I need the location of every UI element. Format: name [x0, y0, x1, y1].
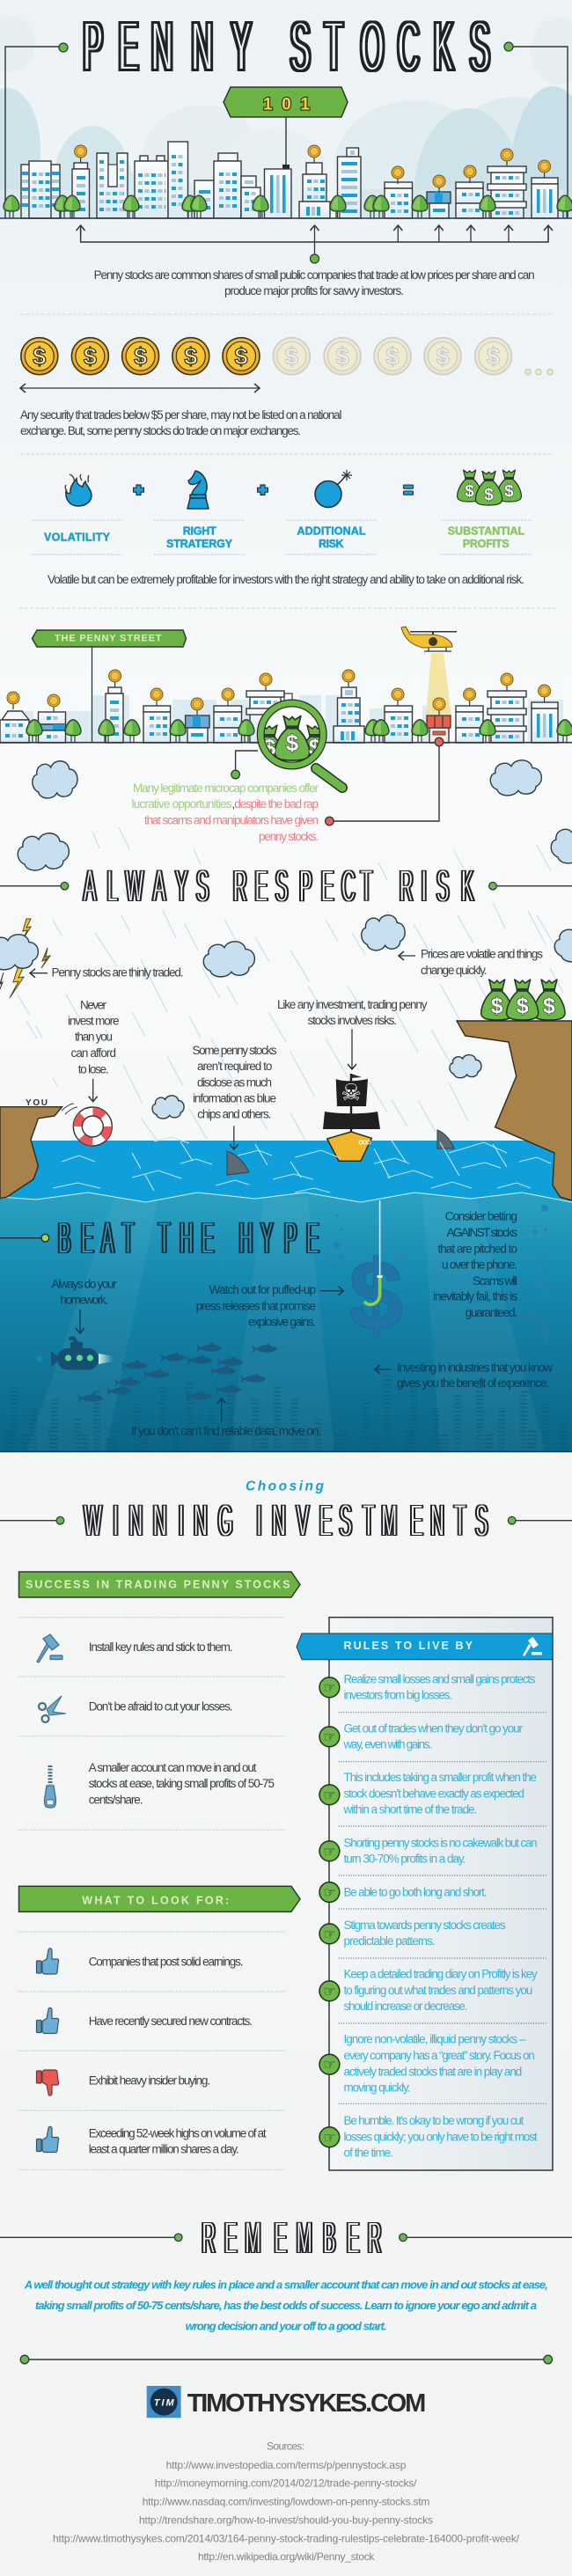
equation labels: RISK — [319, 538, 343, 550]
closing statement — [24, 2279, 548, 2332]
money bags on right cliff: $ — [491, 994, 503, 1018]
callout: industries you know: gives you the benefit of experience. — [397, 1376, 549, 1390]
what to look for list — [18, 1932, 284, 2169]
icon: dollar sign on hook: $ — [348, 1240, 403, 1350]
light rays — [26, 1197, 546, 1451]
callout: trading involves risks — [277, 998, 428, 1069]
callout: prices volatile: Prices are volatile and things — [421, 948, 543, 961]
rule 8: Ignore non-volatile, illiquid penny stocks – — [343, 2033, 526, 2046]
rule 8: moving quickly. — [343, 2081, 410, 2094]
rule 4: Shorting penny stocks is no cakewalk but can — [343, 1836, 538, 1849]
coins row: five dollar price scale: $ — [184, 343, 197, 370]
equation labels — [32, 520, 532, 554]
callout: press releases: press releases that promise — [196, 1299, 316, 1312]
section: the penny street — [0, 627, 572, 843]
rule 3: stock doesn’t behave exactly as expected — [343, 1787, 524, 1800]
logo: timothysykes.com: TIM — [154, 2397, 175, 2408]
callout: never invest more: can afford — [70, 1046, 116, 1060]
rule 8: actively traded stocks that are in play and — [343, 2065, 522, 2078]
item: solid earnings — [37, 1949, 243, 1974]
intro text: Penny stocks are common shares of small public companies that trade at low prices per share and can — [94, 268, 535, 282]
sources: http://www.nasdaq.com/investing/lowdown-on-penny-stocks.stm — [143, 2496, 429, 2508]
equation: volatility + strategy + risk = profits — [32, 470, 532, 554]
wave surface line — [0, 1193, 572, 1202]
water surface — [0, 1141, 572, 1207]
item: 52-week highs: least a quarter million shares a day. — [89, 2143, 239, 2156]
sources: http://trendshare.org/how-to-invest/should-you-buy-penny-stocks — [139, 2514, 433, 2526]
logo: timothysykes.com: TIMOTHYSYKES.COM — [187, 2389, 426, 2418]
callout: bet against stocks: that are pitched to — [438, 1242, 517, 1255]
callout: bet against stocks: inevitably fail, this is — [433, 1290, 517, 1303]
hype text blocks — [51, 1210, 553, 1438]
waves and rain on water — [53, 1137, 551, 1193]
callout: press releases — [196, 1283, 343, 1329]
storm cloud with lightning — [0, 919, 50, 998]
connectors — [231, 738, 444, 826]
magnifying glass over money bags: $ — [286, 730, 299, 756]
text: legitimate microcap companies: Many legitimate microcap companies offer — [133, 782, 319, 795]
sources: http://www.timothysykes.com/2014/03/164-penny-stock-trading-rulestips-celebrate-164000-profit-week/ — [53, 2532, 520, 2544]
callout: do your homework: Always do your — [51, 1277, 117, 1290]
text: below five dollars: Any security that trades below $5 per share, may not be listed on a national — [20, 408, 341, 422]
heading: Choosing: Choosing — [246, 1479, 325, 1493]
coins row: five dollar price scale: $ — [487, 343, 500, 370]
text: legitimate microcap companies: that scams and manipulators have given — [144, 814, 319, 827]
callout: prices volatile — [399, 948, 543, 977]
banner: success in trading penny stocks — [19, 1572, 300, 1597]
bubbles — [37, 1205, 549, 1361]
coins row: five dollar price scale — [21, 338, 553, 375]
money bags on right cliff — [481, 980, 565, 1020]
item: smaller account: cents/share. — [89, 1793, 143, 1806]
icon: blue flame — [65, 474, 92, 506]
text: legitimate microcap companies — [132, 782, 319, 843]
text: legitimate microcap companies: , — [232, 797, 235, 811]
callout: industries you know — [375, 1361, 553, 1390]
sources: Sources: — [267, 2440, 304, 2453]
callout: some penny stocks: disclose as much — [197, 1075, 272, 1089]
callout: bet against stocks: Consider betting — [445, 1210, 517, 1223]
banner: success in trading penny stocks: SUCCESS IN TRADING PENNY STOCKS — [26, 1579, 290, 1591]
money bags on right cliff: $ — [517, 994, 529, 1018]
rule 1: investors from big losses. — [343, 1688, 452, 1701]
text: legitimate microcap companies: despite the bad rap — [234, 797, 319, 811]
success list — [18, 1618, 284, 1830]
sources: http://www.investopedia.com/terms/p/pennystock.asp — [166, 2459, 407, 2471]
street buildings — [0, 670, 572, 743]
callout: press releases: Watch out for puffed-up — [209, 1283, 316, 1296]
icon: bomb — [315, 470, 352, 507]
street sign: THE PENNY STREET — [55, 634, 165, 644]
magnifying glass over money bags: $ — [263, 734, 276, 760]
badge: 101: 101 — [263, 95, 310, 114]
rule 5 — [319, 1882, 488, 1902]
coins row: five dollar price scale: $ — [436, 343, 450, 370]
title: Remember: REMEMBER — [202, 2214, 381, 2264]
rule 9 — [319, 2114, 538, 2159]
rule 6 — [319, 1919, 506, 1948]
coins row: five dollar price scale: $ — [335, 343, 349, 370]
underwater scene — [0, 1193, 572, 1452]
equation labels: PROFITS — [463, 538, 510, 550]
title: Always Respect Risk — [0, 862, 572, 912]
panel: rules to live by — [297, 1618, 553, 2170]
title connector lines — [5, 42, 568, 218]
rule 7: should increase or decrease. — [343, 2000, 468, 2013]
sources — [53, 2440, 520, 2563]
icon: three money bags: $ — [465, 482, 474, 501]
coins row: five dollar price scale: $ — [33, 343, 46, 370]
life ring and you label: YOU — [26, 1098, 48, 1108]
callout: do your homework — [51, 1277, 117, 1333]
callout: some penny stocks — [192, 1044, 277, 1149]
coins row: five dollar price scale: $ — [84, 343, 97, 370]
magnifying glass over money bags — [253, 703, 342, 788]
sources: http://moneymorning.com/2014/02/12/trade-penny-stocks/ — [155, 2477, 417, 2490]
icon: telephone handset — [526, 1317, 546, 1341]
text: volatile but profitable: Volatile but can be extremely profitable for investors with the right strategy and ability to take on additional risk. — [48, 573, 524, 586]
text: legitimate microcap companies: lucrative opportunities — [132, 797, 232, 811]
intro text — [94, 268, 535, 297]
pirate ship: ☠ — [341, 1080, 362, 1106]
rule 3: within a short time of the trade. — [343, 1803, 477, 1816]
rule 5: Be able to go both long and short. — [343, 1885, 488, 1898]
callout: some penny stocks: information as blue — [193, 1091, 276, 1105]
callout: some penny stocks: Some penny stocks — [192, 1044, 277, 1057]
callout: thinly traded: Penny stocks are thinly traded. — [51, 965, 183, 979]
rule 4: turn 30-70% profits in a day. — [343, 1853, 466, 1866]
callout: trading involves risks: stocks involves risks. — [308, 1014, 397, 1027]
banner: rules to live by — [297, 1633, 553, 1660]
skyline background clouds — [0, 86, 572, 218]
money bags on right cliff: $ — [543, 994, 555, 1018]
item: cut losses — [39, 1696, 232, 1722]
callout: never invest more: Never — [80, 998, 107, 1011]
rule 9: losses quickly; you only have to be right most — [343, 2130, 538, 2143]
rule 6: predictable patterns. — [343, 1934, 436, 1948]
icon: chess knight — [187, 471, 209, 509]
callout: bet against stocks: AGAINST stocks — [447, 1226, 517, 1239]
callout: some penny stocks: chips and others. — [197, 1108, 271, 1121]
item: smaller account — [44, 1761, 275, 1808]
rule 7 — [319, 1968, 538, 2013]
callout: bet against stocks — [433, 1210, 517, 1319]
city skyline with coins — [0, 142, 572, 218]
callout: some penny stocks: aren’t required to — [197, 1060, 272, 1073]
equation labels: ADDITIONAL — [297, 525, 366, 538]
rain — [9, 827, 563, 1142]
banner: rules to live by: RULES TO LIVE BY — [343, 1640, 473, 1652]
equation labels: RIGHT — [183, 525, 216, 538]
sharks — [227, 1130, 454, 1175]
street sign — [32, 630, 187, 743]
item: insider buying — [37, 2070, 210, 2095]
callout: never invest more: than you — [75, 1031, 113, 1044]
equation labels: STRATERGY — [166, 538, 233, 550]
coins row: five dollar price scale: $ — [385, 343, 400, 370]
item: 52-week highs: Exceeding 52-week highs on volume of at — [89, 2127, 267, 2140]
callout: reliable data: If you don’t can’t find reliable data, move on. — [131, 1425, 321, 1438]
rule 9: of the time. — [343, 2146, 393, 2159]
callout: press releases: explosive gains. — [248, 1316, 316, 1329]
callout: bet against stocks: u over the phone. — [442, 1259, 517, 1272]
item: install key rules: Install key rules and stick to them. — [89, 1640, 232, 1654]
title: Winning Investments: WINNING INVESTMENTS — [84, 1497, 488, 1546]
callout: do your homework: homework. — [60, 1294, 108, 1307]
magnifying glass over money bags: $ — [309, 734, 322, 760]
rule 2: way, even with gains. — [343, 1738, 432, 1751]
title: Remember — [0, 2214, 572, 2264]
cliffs — [0, 1021, 572, 1200]
item: solid earnings: Companies that post solid earnings. — [89, 1955, 243, 1968]
callout: bet against stocks: Scams will — [473, 1274, 517, 1288]
school of fish — [77, 1342, 278, 1403]
rule 1 — [319, 1672, 536, 1701]
item: new contracts: Have recently secured new contracts. — [89, 2015, 253, 2028]
title: Penny Stocks: PENNY STOCKS — [83, 7, 489, 86]
icon: three money bags — [458, 470, 521, 505]
risk text blocks — [30, 948, 543, 1149]
intro text: produce major profits for savvy investors. — [224, 284, 404, 297]
rule 7: to figuring out what trades and patterns you — [343, 1984, 532, 1997]
rule 3: This includes taking a smaller profit when the — [343, 1771, 537, 1784]
closing statement: taking small profits of 50-75 cents/share, has the best odds of success. Learn to ignore your ego and admit a — [35, 2299, 537, 2312]
clouds — [18, 760, 572, 1119]
coins row: five dollar price scale: $ — [134, 343, 147, 370]
item: cut losses: Don’t be afraid to cut your losses. — [89, 1700, 232, 1714]
closing statement: wrong decision and your off to a good start. — [186, 2319, 387, 2332]
item: install key rules — [37, 1634, 232, 1662]
item: smaller account: A smaller account can move in and out — [89, 1761, 257, 1774]
icon: three money bags: $ — [504, 482, 514, 501]
seaweed — [14, 1373, 563, 1452]
callout: bet against stocks: guaranteed. — [466, 1306, 517, 1319]
text: below five dollars — [20, 408, 341, 437]
icon: dollar sign on hook — [348, 1200, 408, 1350]
equation labels: VOLATILITY — [44, 532, 111, 544]
right cliff — [457, 1021, 572, 1200]
pirate ship — [323, 1074, 380, 1161]
callout: never invest more: invest more — [68, 1015, 120, 1028]
icon: plus — [258, 485, 268, 495]
item: 52-week highs — [37, 2126, 267, 2156]
rule 4 — [319, 1836, 538, 1866]
life ring and you label — [26, 1098, 112, 1146]
text: legitimate microcap companies: penny stocks. — [259, 830, 319, 843]
title: Beat the Hype: BEAT THE HYPE — [58, 1215, 319, 1264]
equation labels: SUBSTANTIAL — [448, 525, 525, 538]
rule 7: Keep a detailed trading diary on Profitly is key — [343, 1968, 538, 1981]
coins row: five dollar price scale: $ — [285, 343, 298, 370]
icon: plus — [134, 485, 143, 495]
sources: http://en.wikipedia.org/wiki/Penny_stock — [198, 2550, 375, 2563]
callout: never invest more — [68, 998, 120, 1102]
rule 8: every company has a “great” story. Focus on — [343, 2049, 535, 2062]
helicopter spotlight — [426, 653, 451, 716]
callout: trading involves risks: Like any investment, trading penny — [277, 998, 428, 1011]
title: Always Respect Risk: ALWAYS RESPECT RISK — [84, 862, 473, 912]
item: smaller account: stocks at ease, taking small profits of 50-75 — [89, 1777, 275, 1790]
closing statement: A well thought out strategy with key rules in place and a smaller account that can move in and out stocks at ease, — [24, 2279, 548, 2292]
arrow: price range — [20, 387, 260, 389]
icon: submarine — [51, 1336, 113, 1369]
icon: equals — [403, 485, 414, 495]
banner: what to look for: WHAT TO LOOK FOR: — [82, 1894, 229, 1906]
rule 6: Stigma towards penny stocks creates — [343, 1919, 506, 1932]
rule 3 — [319, 1771, 537, 1816]
rule 8 — [319, 2033, 535, 2094]
divider with dots — [20, 2355, 552, 2364]
pale background buildings — [5, 695, 563, 743]
helicopter — [401, 627, 457, 651]
arrows to penny stock buildings — [81, 225, 548, 263]
text: below five dollars: exchange. But, some penny stocks do trade on major exchanges. — [20, 424, 301, 437]
callout: never invest more: to lose. — [78, 1062, 109, 1075]
item: new contracts — [37, 2007, 253, 2033]
badge: 101 — [224, 87, 348, 169]
banner: what to look for — [19, 1886, 300, 1912]
rule 2: Get out of trades when they don’t go your — [343, 1721, 523, 1735]
rule 2 — [319, 1721, 523, 1751]
left cliff — [0, 1107, 62, 1199]
icon: three money bags: $ — [484, 486, 494, 504]
item: insider buying: Exhibit heavy insider buying. — [89, 2074, 210, 2088]
rule 9: Be humble. It’s okay to be wrong if you cut — [343, 2114, 524, 2127]
callout: prices volatile: change quickly. — [421, 964, 488, 977]
coins row: five dollar price scale: $ — [234, 343, 248, 370]
rule 1: Realize small losses and small gains protects — [343, 1672, 536, 1685]
callout: industries you know: Investing in industries that you know — [397, 1361, 553, 1374]
